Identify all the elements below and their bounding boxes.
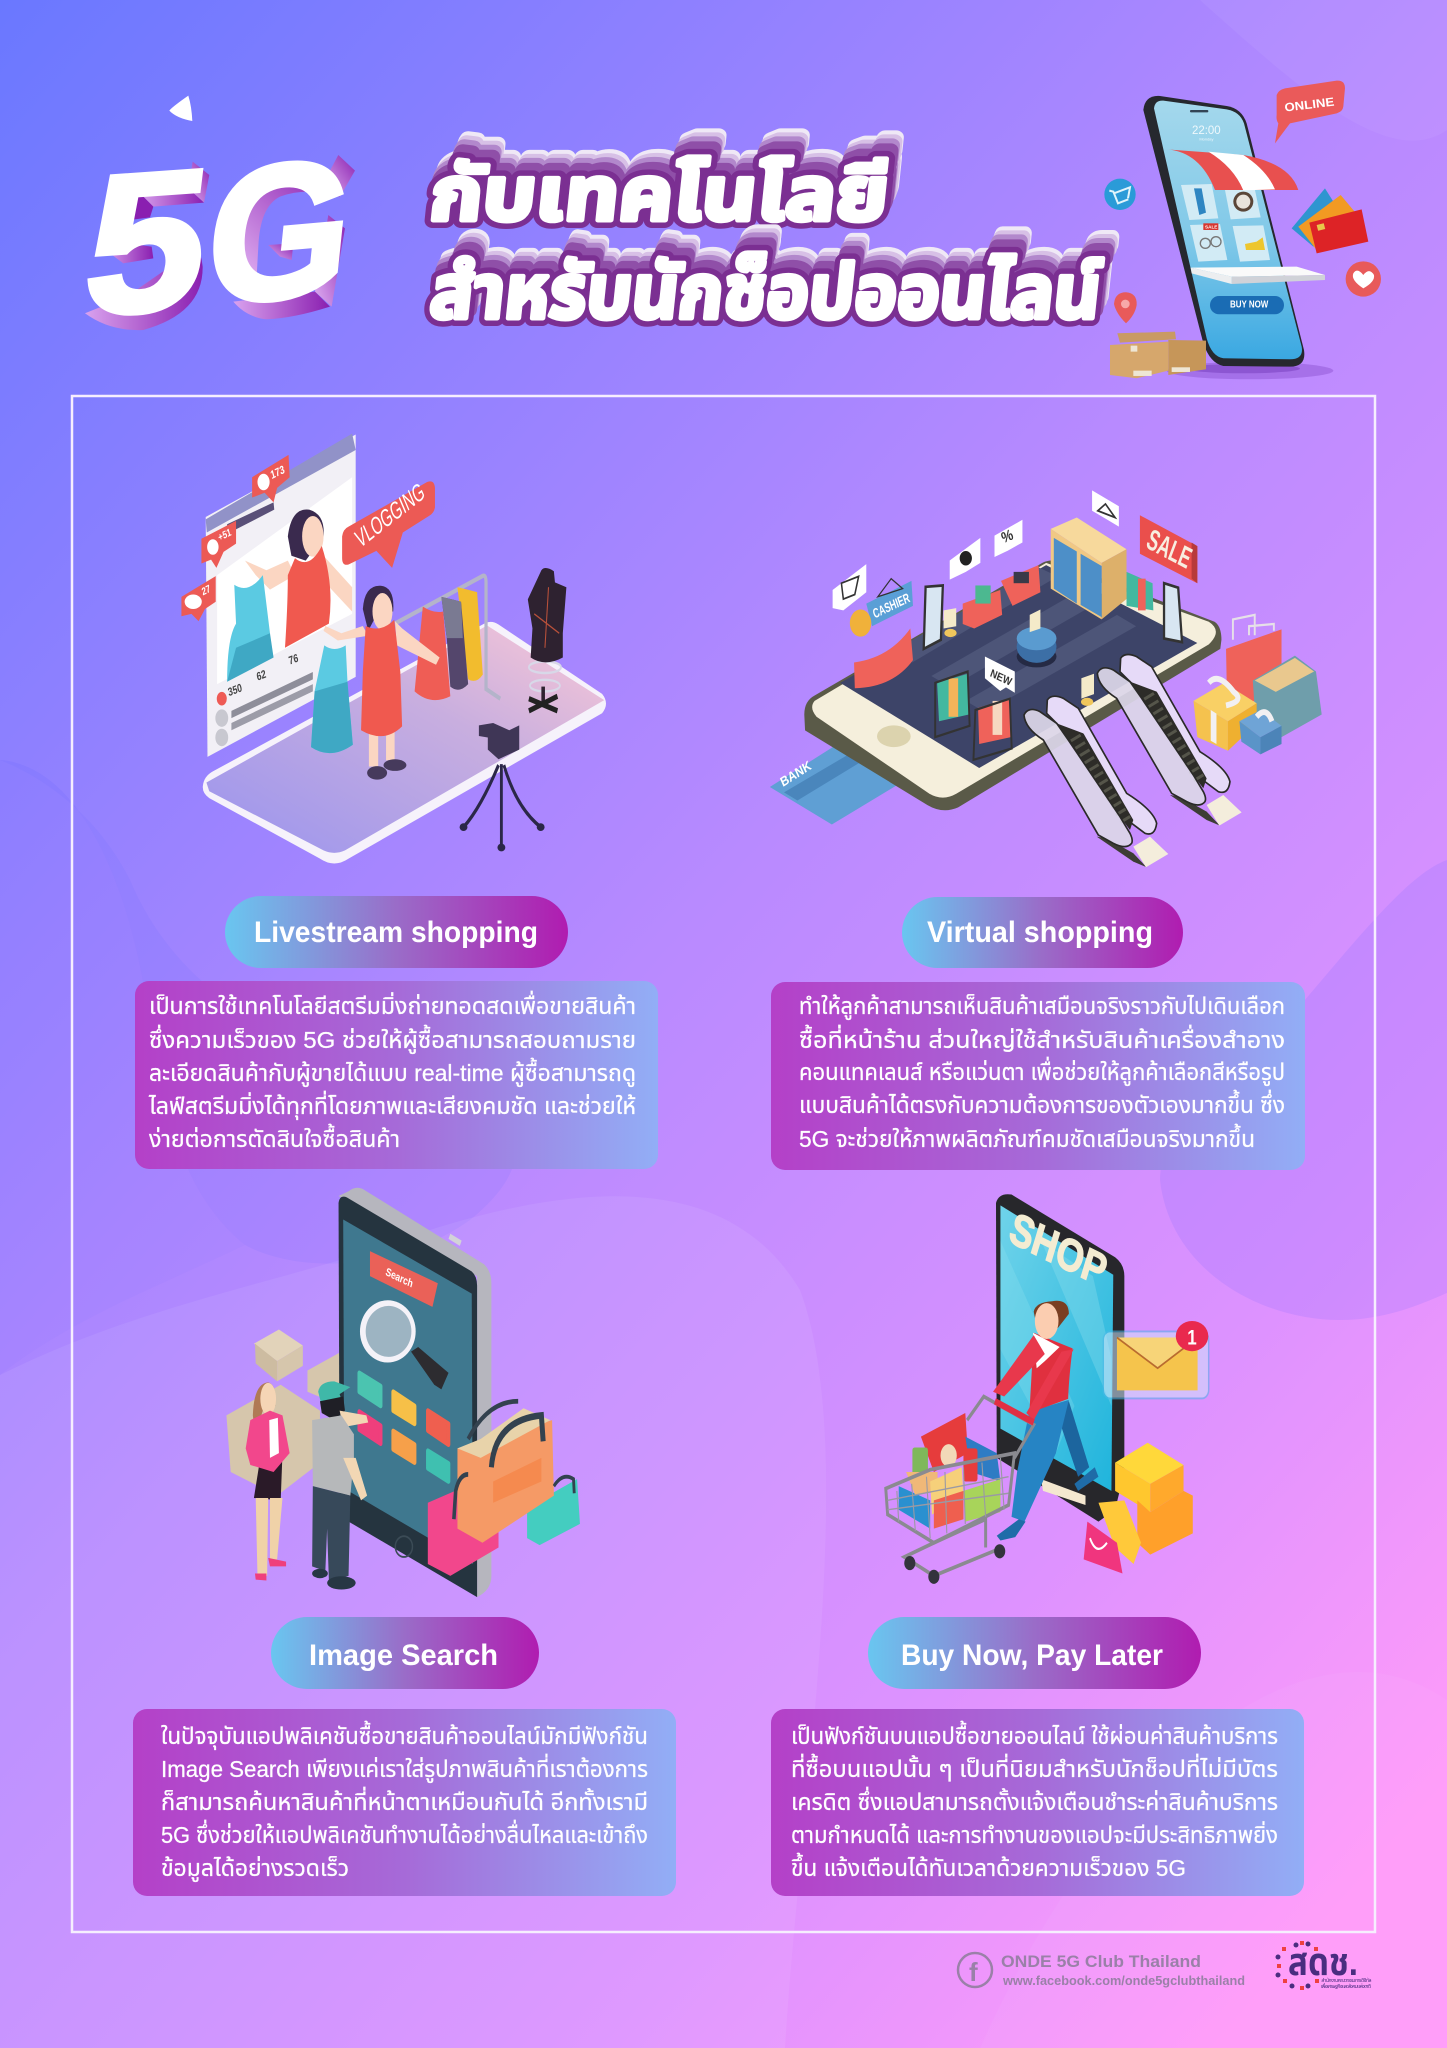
mirrors and shelves	[924, 565, 1182, 706]
shelf	[1191, 267, 1325, 277]
heading pill: Virtual shopping	[927, 916, 1153, 949]
illustration: header shopping phone: BUY NOW	[1230, 299, 1269, 310]
illustration: header shopping phone: Monday	[1199, 136, 1214, 141]
bank card: BANK	[778, 758, 813, 790]
phone: SHOP	[1004, 1202, 1113, 1296]
envelope notification: 1	[1187, 1326, 1197, 1350]
illustration: escalators	[1024, 655, 1242, 867]
illustration: livestream shopping	[181, 434, 606, 864]
heading pill	[868, 1617, 1201, 1689]
description	[771, 982, 1305, 1170]
post panel	[206, 435, 356, 757]
like bubbles: 173	[269, 464, 286, 482]
illustration: livestream shopping: 62	[256, 668, 268, 684]
vlogging bubble: VLOGGING	[352, 478, 428, 554]
shopping bags	[428, 1401, 580, 1576]
standing presenter	[311, 586, 440, 780]
footer: agency logo: สดช.	[1288, 1942, 1358, 1984]
title: Thai heading: กับเทคโนโลยี	[430, 144, 897, 229]
heading pill: Livestream shopping	[254, 916, 538, 949]
clothing racks	[935, 572, 1153, 760]
footer: agency logo: เพื่อเศรษฐกิจและสังคมแห่งชาติ	[1321, 1982, 1371, 1990]
section: image search	[133, 1617, 676, 1896]
description: ในปัจจุบันแอปพลิเคชันซื้อขายสินค้าออนไลน์มักมีฟังก์ชัน	[161, 1720, 648, 1750]
description: 5G ซึ่งช่วยให้แอปพลิเคชันทำงานได้อย่างลื่นไหลและเข้าถึง	[161, 1819, 648, 1848]
heading pill	[902, 897, 1183, 968]
like bubbles	[181, 455, 290, 621]
presenter on screen	[288, 509, 324, 561]
rack with dresses	[395, 576, 500, 700]
title: Thai heading: กับเทคโนโลยี	[426, 152, 893, 237]
product tiles	[1181, 184, 1270, 262]
footer: facebook credit: www.facebook.com/onde5gclubthailand	[1002, 1973, 1245, 1988]
description	[133, 1709, 676, 1896]
icon: accent mark	[169, 96, 192, 121]
title: Thai heading: สำหรับนักช็อปออนไลน์	[435, 229, 1114, 314]
illustration: buy now pay later	[886, 1194, 1209, 1584]
title: Thai heading: สำหรับนักช็อปออนไลน์	[432, 237, 1110, 322]
description: ที่ซื้อบนแอปนั้น ๆ เป็นที่นิยมสำหรับนักช็อปที่ไม่มีบัตร	[791, 1753, 1278, 1782]
clothing racks: NEW	[988, 668, 1013, 689]
woman	[246, 1382, 290, 1581]
illustration: image search	[226, 1188, 580, 1597]
title: Thai heading: สำหรับนักช็อปออนไลน์	[426, 250, 1105, 335]
cashier counter and sign: CASHIER	[871, 591, 912, 622]
title: Thai heading: กับเทคโนโลยี	[434, 135, 901, 220]
title: Thai heading: กับเทคโนโลยี	[432, 139, 898, 224]
heading pill	[225, 896, 568, 968]
description: เป็นฟังก์ชันบนแอปซื้อขายออนไลน์ ใช้ผ่อนค่าสินค้าบริการ	[791, 1720, 1278, 1749]
search sign	[370, 1251, 438, 1307]
description: ซึ่งความเร็วของ 5G ช่วยให้ผู้ซื้อสามารถสอบถามราย	[149, 1024, 636, 1055]
parcels and bags	[1084, 1443, 1193, 1573]
credit cards	[1292, 188, 1345, 247]
pin	[1114, 292, 1137, 323]
3D extrusion	[85, 155, 355, 330]
dress on screen	[227, 575, 270, 682]
phone	[339, 1188, 491, 1597]
heart badge	[1346, 261, 1381, 297]
search sign: Search	[384, 1266, 414, 1291]
like bubbles: 27	[201, 583, 212, 598]
parcels	[226, 1330, 341, 1496]
title: 5G: G	[197, 118, 363, 346]
illustration: livestream shopping: 76	[288, 652, 300, 668]
illustration: virtual shopping	[770, 490, 1322, 825]
description: ข้อมูลได้อย่างรวดเร็ว	[161, 1855, 349, 1883]
cart badge	[1104, 179, 1136, 210]
clock: 22:00	[1192, 123, 1221, 137]
sale sign: SALE	[1142, 523, 1196, 576]
title: 5G: 5	[74, 127, 220, 359]
illustration: header shopping phone: ONLINE	[1284, 95, 1335, 115]
footer: facebook credit	[958, 1952, 1245, 1988]
content frame	[72, 396, 1375, 1932]
buy now button	[1210, 296, 1284, 314]
icon: magnifier	[360, 1300, 449, 1389]
shopping cart	[886, 1397, 1034, 1584]
post stats: 350	[227, 682, 244, 700]
floating tags	[841, 490, 1119, 599]
envelope notification	[1103, 1321, 1209, 1398]
title: Thai heading	[426, 131, 1114, 335]
description: ซื้อที่หน้าร้าน ส่วนใหญ่ใช้สำหรับสินค้าเครื่องสำอาง	[799, 1024, 1285, 1053]
product tiles: SALE	[1205, 224, 1217, 229]
section: buy now pay later	[771, 1617, 1304, 1896]
back escalator	[1097, 655, 1242, 826]
heading pill: Buy Now, Pay Later	[901, 1639, 1163, 1672]
icon: facebook	[958, 1953, 992, 1987]
phone base	[804, 561, 1221, 810]
cashier counter and sign	[833, 564, 913, 688]
vlogging bubble	[342, 478, 435, 568]
online bubble	[1275, 81, 1345, 143]
mannequin	[528, 568, 566, 711]
camera on tripod	[460, 723, 545, 851]
description: เป็นการใช้เทคโนโลยีสตรีมมิ่งถ่ายทอดสดเพื่อขายสินค้า	[149, 990, 636, 1019]
title: Thai heading: กับเทคโนโลยี	[435, 131, 902, 216]
section: livestream shopping	[135, 896, 658, 1169]
man	[312, 1381, 368, 1590]
section: virtual shopping	[771, 897, 1305, 1170]
description: 5G จะช่วยให้ภาพผลิตภัณฑ์คมชัดเสมือนจริงมากขึ้น	[799, 1123, 1255, 1152]
description: ทำให้ลูกค้าสามารถเห็นสินค้าเสมือนจริงราวกับไปเดินเลือก	[799, 993, 1285, 1021]
icon: facebook: f	[969, 1957, 978, 1987]
title: Thai heading: สำหรับนักช็อปออนไลน์	[434, 233, 1113, 318]
footer: agency logo: สำนักงานคณะกรรมการดิจิทัล	[1321, 1977, 1372, 1984]
description: เครดิต ซึ่งแอปสามารถตั้งแจ้งเตือนชำระค่าสินค้าบริการ	[791, 1786, 1278, 1815]
description: ไลฟ์สตรีมมิ่งได้ทุกที่โดยภาพและเสียงคมชัด และช่วยให้	[148, 1090, 636, 1120]
app icons	[359, 1373, 449, 1481]
phone	[996, 1194, 1124, 1522]
bank card	[770, 742, 905, 825]
tablet platform	[203, 622, 606, 864]
description: Image Search เพียงแค่เราใส่รูปภาพสินค้าที่เราต้องการ	[161, 1753, 648, 1784]
description	[771, 1709, 1304, 1896]
footer: facebook credit: ONDE 5G Club Thailand	[1001, 1952, 1201, 1971]
woman with cart	[993, 1301, 1098, 1540]
description: ง่ายต่อการตัดสินใจซื้อสินค้า	[149, 1123, 400, 1152]
illustration: header shopping phone	[1104, 81, 1381, 379]
heading pill: Image Search	[309, 1639, 498, 1672]
description: คอนแทคเลนส์ หรือแว่นตา เพื่อช่วยให้ลูกค้าเลือกสีหรือรูป	[799, 1056, 1285, 1087]
heading pill	[271, 1617, 539, 1689]
cardboard boxes	[1117, 332, 1176, 343]
description: ก็สามารถค้นหาสินค้าที่หน้าตาเหมือนกันได้ อีกทั้งเรามี	[161, 1786, 648, 1815]
front escalator	[1024, 696, 1168, 867]
title: Thai heading: สำหรับนักช็อปออนไลน์	[430, 242, 1109, 327]
floating tags: %	[1000, 526, 1016, 547]
title: 5G	[74, 96, 363, 359]
description: ละเอียดสินค้ากับผู้ขายได้แบบ real-time ผู้ซื้อสามารถดู	[149, 1057, 636, 1088]
fitting rooms	[1051, 518, 1127, 619]
title: Thai heading: กับเทคโนโลยี	[426, 152, 893, 237]
title: Thai heading: สำหรับนักช็อปออนไลน์	[426, 250, 1105, 335]
like bubbles: +51	[217, 526, 232, 543]
awning	[1167, 149, 1298, 190]
shopping bags and gifts	[1193, 615, 1322, 754]
description: แบบสินค้าได้ตรงกับความต้องการของตัวเองมากขึ้น ซึ่ง	[799, 1089, 1285, 1118]
description	[135, 981, 658, 1169]
description: ขึ้น แจ้งเตือนได้ทันเวลาด้วยความเร็วของ 5G	[791, 1852, 1186, 1881]
description: ตามกำหนดได้ และการทำงานของแอปจะมีประสิทธิภาพยิ่ง	[791, 1820, 1278, 1848]
